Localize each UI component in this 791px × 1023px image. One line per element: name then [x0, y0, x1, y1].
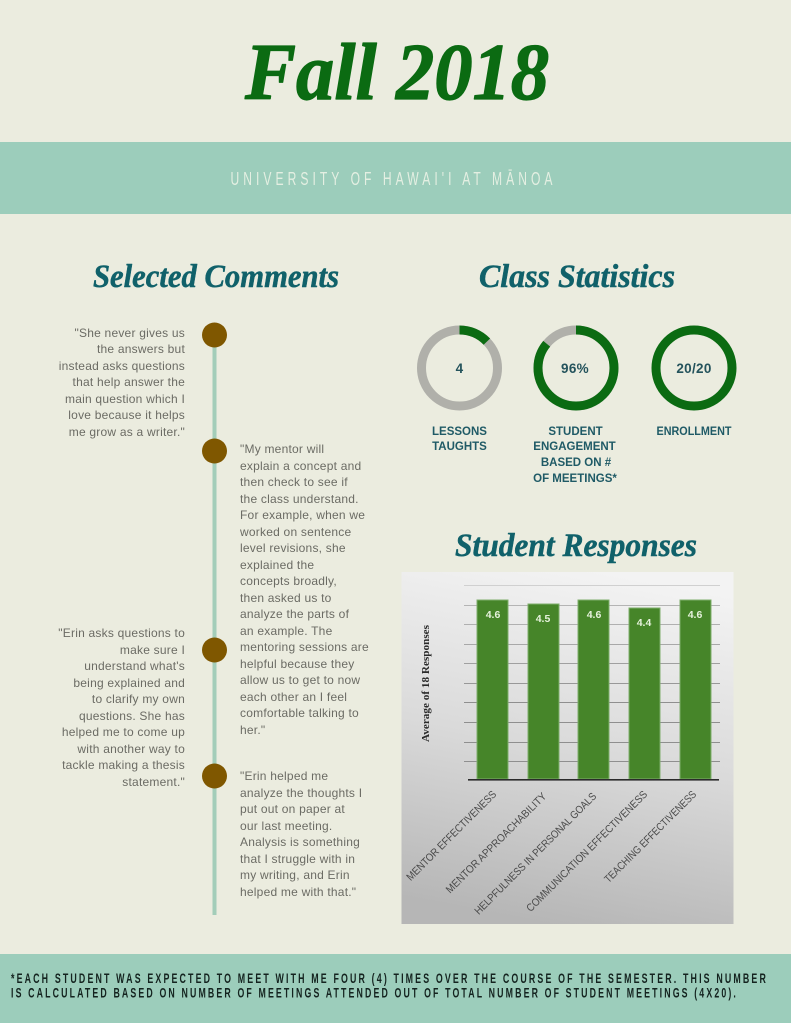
comment 2: concepts broadly,: [240, 574, 337, 588]
comment 3: "Erin asks questions to: [58, 626, 185, 640]
comment 4: that I struggle with in: [240, 852, 355, 866]
comment 2: explained the: [240, 558, 314, 572]
comment 3: helped me to come up: [62, 725, 185, 739]
timeline dot 4: [202, 764, 227, 788]
comment 2: the class understand.: [240, 492, 359, 506]
comment 2: then check to see if: [240, 475, 348, 489]
title: Fall 2018: [244, 29, 549, 117]
comment 3: being explained and: [73, 676, 185, 690]
comment 2: then asked us to: [240, 591, 332, 605]
comment 1: instead asks questions: [59, 359, 185, 373]
header band: [0, 142, 791, 214]
stat: enrollment: 20/20: [676, 361, 712, 376]
comment 1: [59, 326, 185, 439]
comment 4: "Erin helped me: [240, 769, 328, 783]
comment 4: Analysis is something: [240, 835, 360, 849]
comment 1: that help answer the: [73, 375, 185, 389]
footer band: [0, 954, 791, 1023]
comment 4: analyze the thoughts I: [240, 786, 362, 800]
bar: mentor effectiveness 4.6: 4.6: [486, 609, 500, 621]
category labels: MENTOR EFFECTIVENESS: [404, 789, 499, 883]
comment 2: level revisions, she: [240, 541, 346, 555]
comment 3: [58, 626, 185, 789]
footnote: [11, 970, 768, 1000]
timeline dot 2: [202, 438, 227, 464]
heading: selected comments: Selected Comments: [93, 259, 339, 295]
comment 3: questions. She has: [79, 709, 185, 723]
stat: lessons taught: [422, 330, 498, 453]
bar: helpfulness 4.6: 4.6: [587, 609, 601, 621]
bar chart: [402, 572, 734, 924]
label: lessons: TAUGHTS: [432, 441, 487, 453]
comment 2: allow us to get to now: [240, 673, 360, 687]
stat: student engagement: [533, 330, 617, 485]
timeline dot 1: [202, 322, 227, 348]
comment 2: comfortable talking to: [240, 706, 359, 720]
label: engagement: ENGAGEMENT: [533, 441, 616, 453]
comment 2: analyze the parts of: [240, 607, 350, 621]
comment 3: statement.": [122, 775, 185, 789]
label: engagement: BASED ON #: [541, 457, 612, 469]
label: lessons: [432, 426, 487, 453]
label: enrollment: ENROLLMENT: [656, 426, 732, 438]
comment 1: main question which I: [65, 392, 185, 406]
comment 2: [239, 442, 369, 737]
heading: class statistics: Class Statistics: [479, 259, 675, 295]
comment 1: the answers but: [97, 342, 185, 356]
label: lessons: LESSONS: [432, 426, 487, 438]
label: engagement: STUDENT: [548, 426, 603, 438]
comment 2: "My mentor will: [240, 442, 324, 456]
donut: enrollment: [656, 330, 732, 406]
comment 3: understand what's: [84, 659, 185, 673]
category labels: COMMUNICATION EFFECTIVENESS: [524, 789, 650, 915]
comment 1: me grow as a writer.": [69, 425, 185, 439]
bar: mentor effectiveness 4.6: [477, 600, 508, 779]
comment 4: [240, 769, 362, 899]
comment 2: helpful because they: [240, 657, 354, 671]
label: engagement: [533, 426, 617, 485]
category labels: HELPFULNESS IN PERSONAL GOALS: [473, 791, 599, 917]
comment 2: explain a concept and: [240, 459, 361, 473]
stat: lessons taught: 4: [456, 361, 464, 376]
comment 2: each other an I feel: [240, 690, 347, 704]
bar: mentor approachability 4.5: [528, 604, 559, 779]
bar: mentor approachability 4.5: 4.5: [536, 613, 550, 625]
comment 1: "She never gives us: [74, 326, 185, 340]
comment 4: helped me with that.": [240, 885, 356, 899]
comment 2: mentoring sessions are: [240, 640, 369, 654]
bar: communication 4.4: 4.4: [637, 617, 651, 629]
label: engagement: OF MEETINGS*: [533, 473, 617, 485]
y axis title: Average of 18 Responses: [421, 625, 432, 742]
comment 2: worked on sentence: [239, 525, 351, 539]
comment 4: put out on paper at: [240, 802, 345, 816]
donut: engagement: [538, 330, 614, 406]
timeline: [202, 322, 227, 915]
comment 4: our last meeting.: [240, 819, 332, 833]
comment 2: her.": [240, 723, 265, 737]
heading: student responses: Student Responses: [455, 528, 697, 564]
donut: lessons: [422, 330, 498, 406]
bar: helpfulness 4.6: [578, 600, 609, 779]
comment 3: tackle making a thesis: [62, 758, 185, 772]
category labels: [404, 789, 699, 917]
comment 1: love because it helps: [68, 408, 185, 422]
category labels: TEACHING EFFECTIVENESS: [602, 789, 699, 886]
comment 3: with another way to: [76, 742, 185, 756]
subtitle: UNIVERSITY OF HAWAI'I AT MĀNOA: [230, 169, 556, 189]
bar: communication 4.4: [629, 608, 660, 779]
stat: student engagement: 96%: [561, 361, 589, 376]
comment 4: my writing, and Erin: [240, 868, 350, 882]
timeline dot 3: [202, 638, 227, 662]
chart baseline: [468, 779, 719, 781]
stat: enrollment: [656, 330, 732, 438]
bar: teaching 4.6: 4.6: [688, 609, 702, 621]
bar: teaching 4.6: [680, 600, 711, 779]
category labels: MENTOR APPROACHABILITY: [444, 791, 549, 896]
comment 3: to clarify my own: [92, 692, 185, 706]
comment 2: an example. The: [240, 624, 333, 638]
comment 2: For example, when we: [240, 508, 365, 522]
comment 3: make sure I: [120, 643, 185, 657]
